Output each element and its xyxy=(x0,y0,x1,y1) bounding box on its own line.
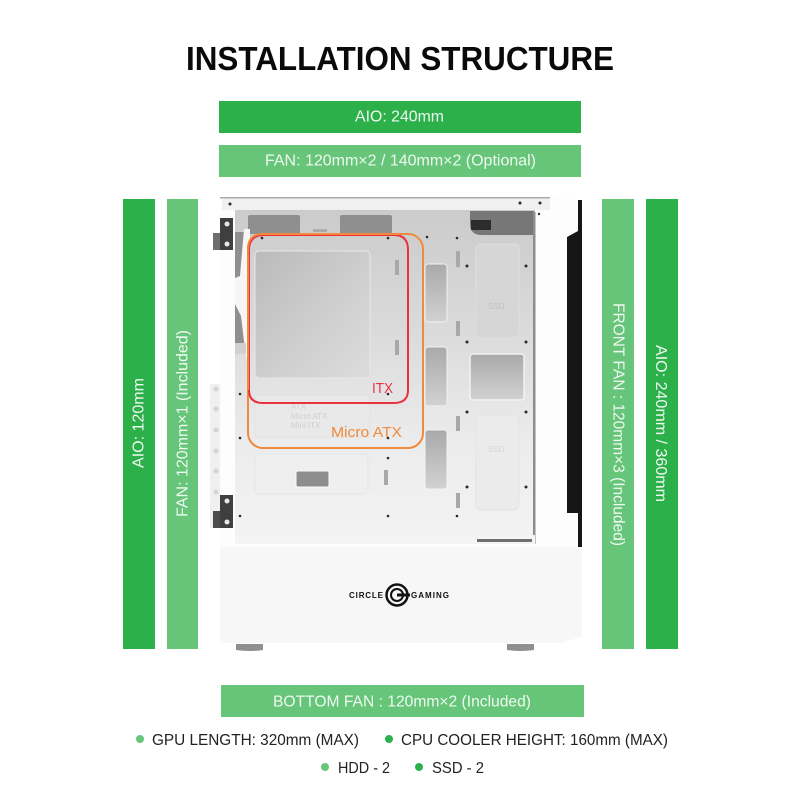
bottom shadow strip xyxy=(235,535,535,544)
right bar: front AIO: AIO: 240mm / 360mm xyxy=(652,345,669,502)
brand logo xyxy=(349,584,449,606)
standoff screws xyxy=(228,202,542,517)
right bar: front fan: FRONT FAN : 120mm×3 (Included) xyxy=(610,303,626,546)
board labels: Mini ITX xyxy=(291,421,321,430)
right edge shade xyxy=(533,212,536,544)
brand logo: CIRCLE xyxy=(349,591,384,600)
hinge top xyxy=(213,218,233,250)
large window xyxy=(255,251,370,378)
right window xyxy=(470,354,524,400)
bottom bar: bottom fans: BOTTOM FAN : 120mm×2 (Included) xyxy=(273,694,531,710)
spec: GPU length: GPU LENGTH: 320mm (MAX) xyxy=(152,732,359,749)
case frame xyxy=(220,197,578,547)
left bar: rear fan: FAN: 120mm×1 (Included) xyxy=(174,330,192,517)
SSD plate lower: SSD xyxy=(488,445,505,454)
right bar: front AIO xyxy=(646,199,678,649)
ITX outline: ITX xyxy=(372,381,393,397)
right bar: front fan xyxy=(602,199,634,649)
tray slits xyxy=(384,251,460,508)
left bar: rear fan xyxy=(167,199,198,649)
spec: SSD: SSD - 2 xyxy=(432,760,484,777)
brand logo: GAMING xyxy=(411,591,449,600)
left fan shape xyxy=(235,229,250,358)
top bar: optional fans: FAN: 120mm×2 / 140mm×2 (Optional) xyxy=(265,152,536,170)
lower plate xyxy=(255,454,368,494)
SSD plate upper xyxy=(476,244,519,338)
top vents xyxy=(248,215,392,234)
spec: HDD: HDD - 2 xyxy=(338,760,390,777)
SSD plate lower xyxy=(476,415,519,510)
vertical slots xyxy=(425,264,447,489)
hinge bottom xyxy=(213,495,233,528)
spec: CPU cooler height: CPU COOLER HEIGHT: 160mm (MAX) xyxy=(401,732,668,749)
left bar: AIO 120mm xyxy=(123,199,155,649)
computer case xyxy=(210,197,582,651)
Micro ATX outline: Micro ATX xyxy=(331,425,402,441)
top bar: AIO 240mm: AIO: 240mm xyxy=(355,108,444,126)
bottom bar: bottom fans xyxy=(221,685,584,717)
board labels: ATX xyxy=(291,402,307,411)
interior panel xyxy=(235,210,535,544)
top bar: AIO 240mm xyxy=(219,101,581,133)
top right cutout xyxy=(470,211,534,235)
board labels: Micro ATX xyxy=(291,412,328,421)
foot right xyxy=(507,644,534,651)
Micro ATX outline xyxy=(248,234,423,448)
top edge xyxy=(220,197,550,198)
foot left xyxy=(236,644,263,651)
side bracket xyxy=(210,384,222,528)
black front panel xyxy=(567,200,582,547)
SSD plate upper: SSD xyxy=(488,302,505,311)
title: INSTALLATION STRUCTURE xyxy=(186,41,614,78)
case base xyxy=(220,547,582,643)
top bar: optional fans xyxy=(219,145,581,177)
ITX outline xyxy=(248,234,408,403)
board labels xyxy=(255,395,370,437)
left bar: AIO 120mm: AIO: 120mm xyxy=(130,378,148,468)
